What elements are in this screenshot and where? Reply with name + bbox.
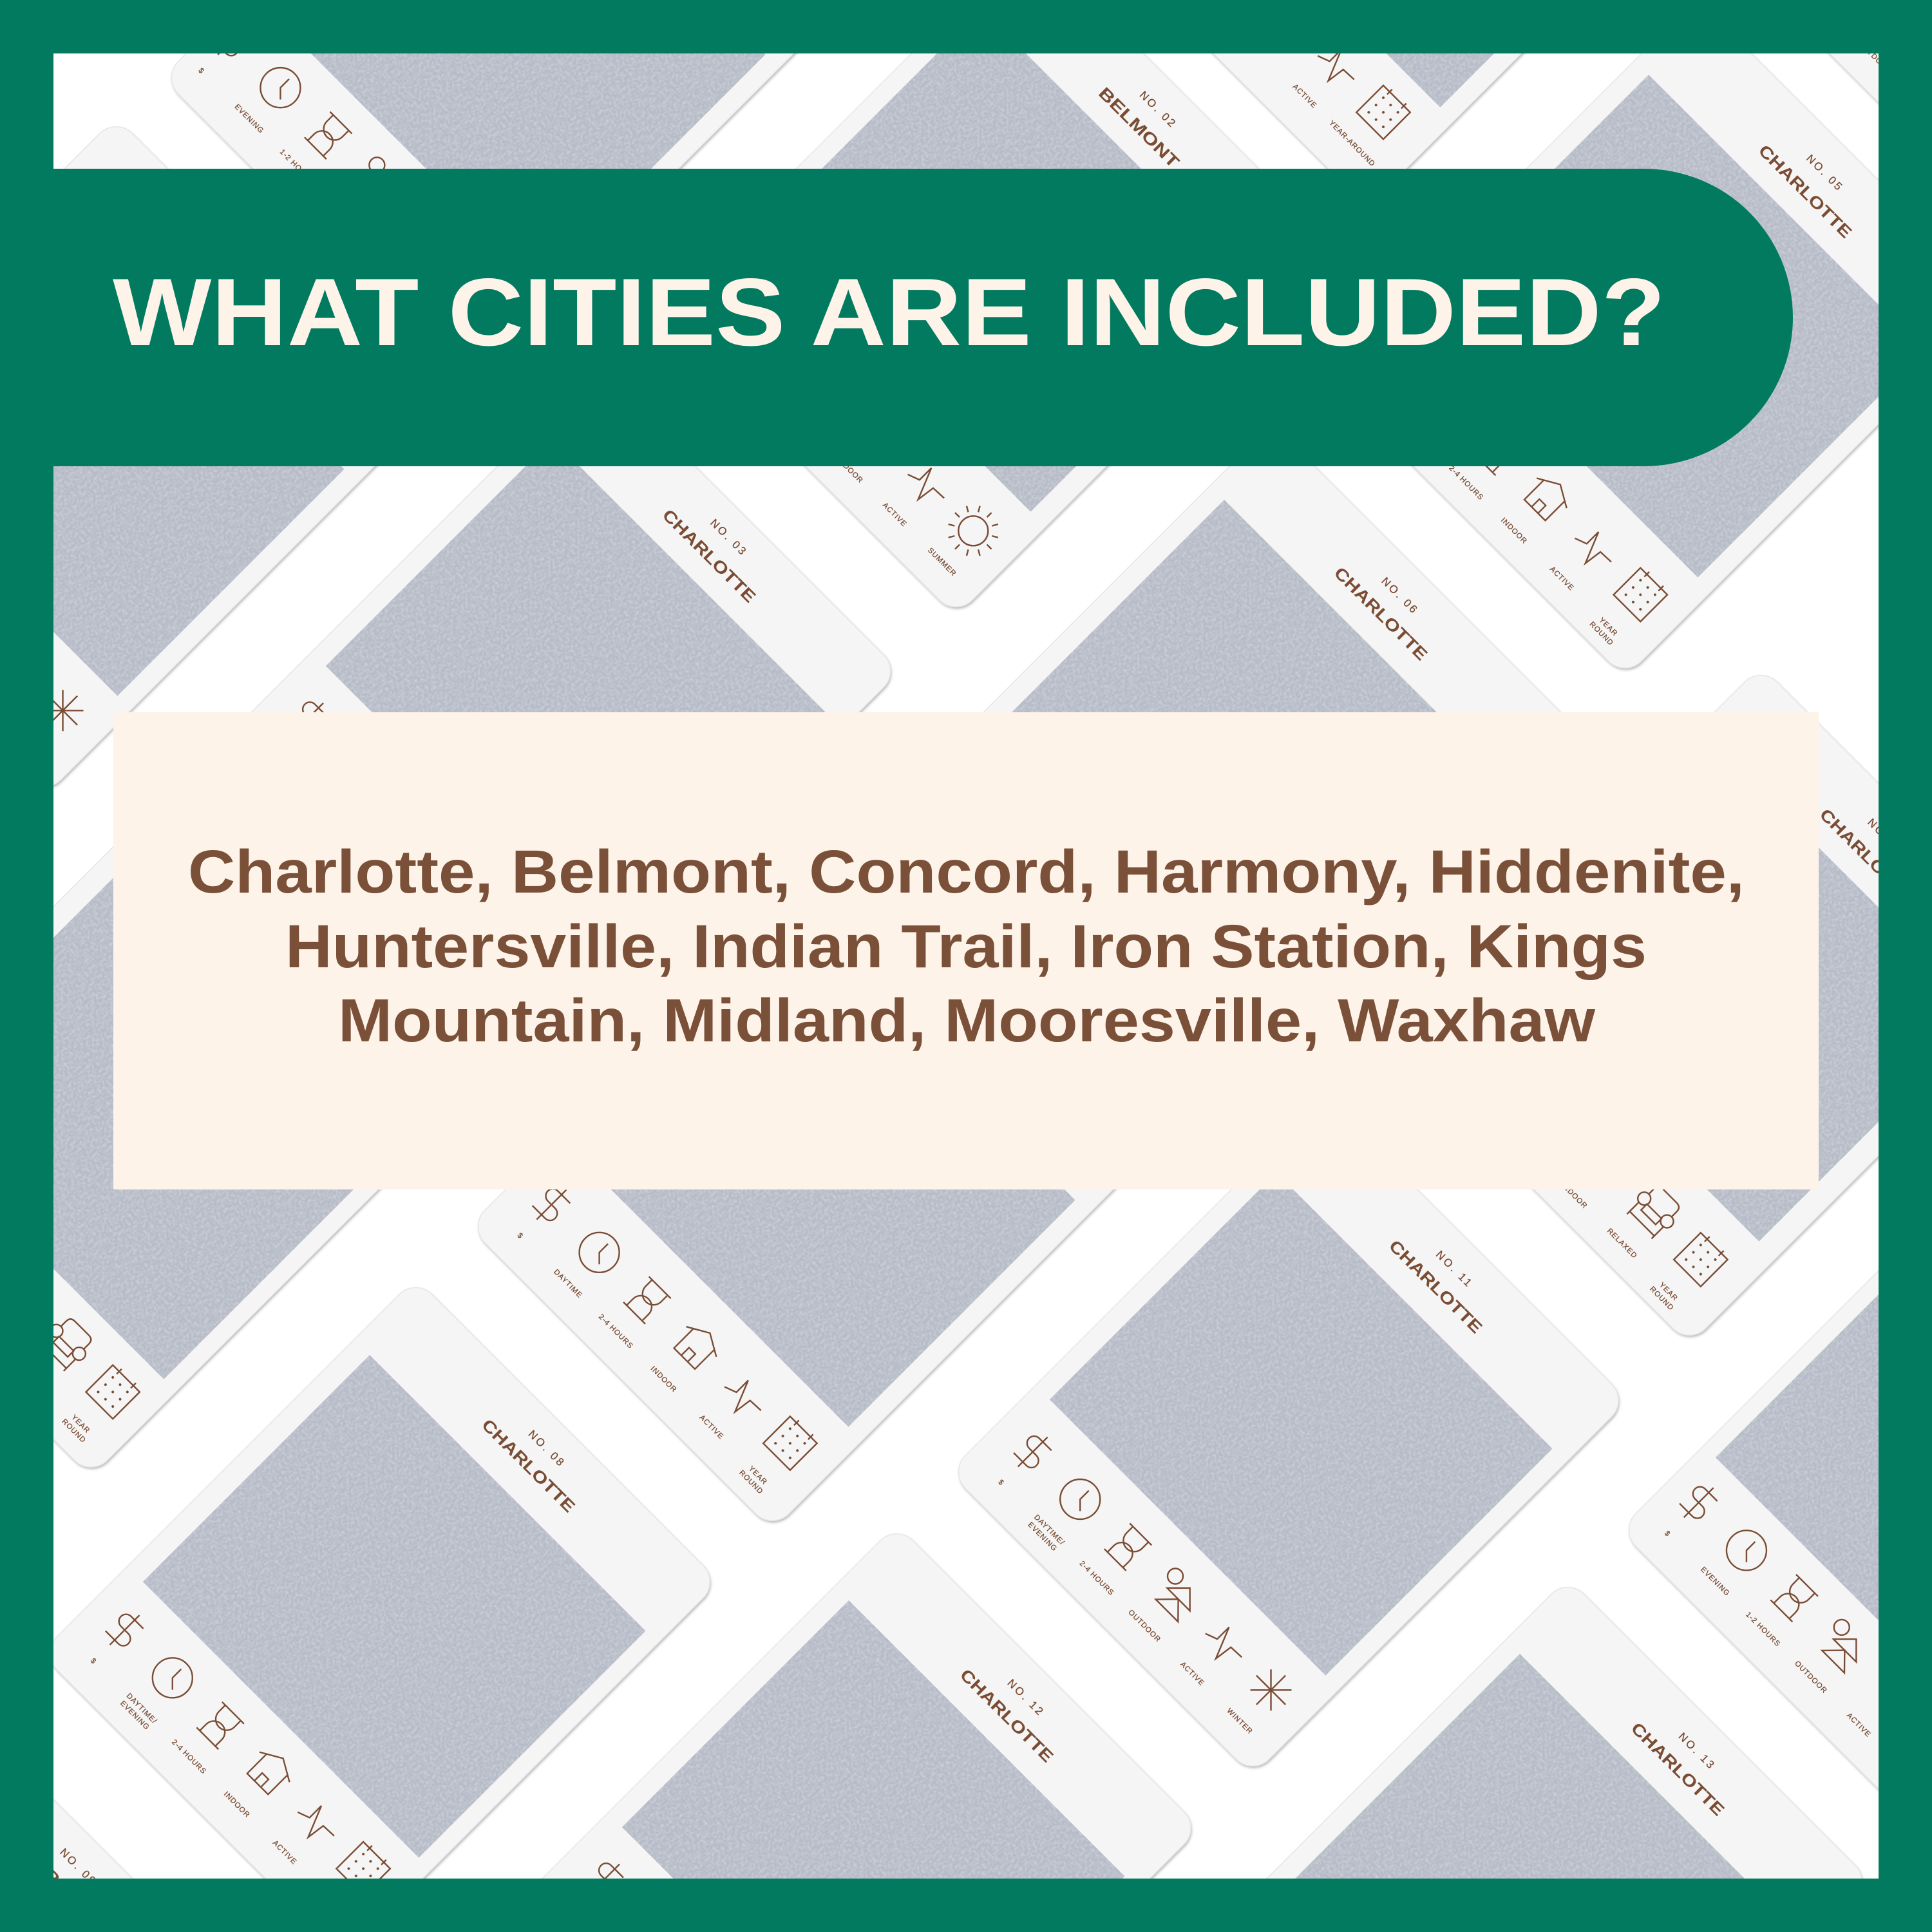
title: CHARLOTTE [9, 1833, 110, 1932]
label: outdoor: OUTDOOR [1857, 40, 1892, 75]
strip [75, 1605, 393, 1922]
strip: WINTER [1225, 1707, 1254, 1736]
title: CHARLOTTE [956, 1665, 1057, 1766]
text block: cities: Huntersville, Indian Trail, Iron Station, Kings [285, 913, 1647, 981]
title: CHARLOTTE [1331, 563, 1432, 664]
strip: ACTIVE [1548, 565, 1575, 592]
card: No. 02 Belmont [652, 0, 1332, 618]
card: bottom-left corner [0, 1696, 255, 1932]
title: CHARLOTTE [1627, 1718, 1728, 1819]
strip: EVENING [118, 1700, 151, 1732]
strip: ROUND [1648, 1285, 1675, 1312]
title [9, 1818, 126, 1932]
title: NO. 08 [526, 1428, 566, 1468]
title [1627, 1703, 1745, 1819]
strip: ACTIVE [1845, 1712, 1872, 1739]
strip: DAYTIME [552, 1268, 583, 1300]
strip: active, summer: SUMMER [926, 547, 958, 578]
strip: 2-4 HOURS [597, 1313, 634, 1350]
strip: 2-4 HOURS [1447, 464, 1485, 502]
title: NO. 03 [708, 516, 748, 557]
title: NO. 06 [1379, 575, 1419, 616]
title: CHARLOTTE [1385, 1236, 1486, 1337]
title [478, 1400, 594, 1516]
strip: $ [516, 1232, 524, 1240]
strip: OUTDOOR [1126, 1609, 1162, 1644]
strip: INDOOR [1560, 1181, 1589, 1211]
icon: dollar [285, 694, 332, 741]
strip [8, 1312, 142, 1447]
card: top-left partly hidden [0, 117, 421, 798]
strip: active, summer: OUTDOOR [829, 450, 864, 485]
strip: cost, time, duration: EVENING [233, 103, 265, 135]
strip: active, year-around: YEAR-AROUND [1327, 119, 1376, 168]
strip: active, summer [829, 402, 1010, 583]
strip: 1-2 HOURS [1744, 1611, 1782, 1649]
title: NO. 05 [1804, 152, 1844, 193]
title: Belmont [1095, 68, 1199, 172]
strip: ROUND [60, 1417, 87, 1444]
icon: winter [33, 681, 92, 740]
strip [1439, 420, 1670, 650]
title [1385, 1220, 1502, 1337]
title: NO. 10 [1865, 816, 1906, 857]
card: No. 06 Charlotte [896, 424, 1577, 1104]
card: No. 11 Charlotte [949, 1097, 1629, 1777]
panel: city list [113, 712, 1819, 1189]
strip [983, 1428, 1300, 1745]
strip: 2-4 HOURS [170, 1738, 207, 1776]
strip: YEAR [1597, 616, 1619, 638]
card: left edge behind text panel [0, 798, 468, 1479]
card: No. 13 Charlotte [1192, 1578, 1873, 1932]
strip: YEAR [70, 1414, 91, 1435]
title: Belmont: BELMONT [1095, 83, 1183, 172]
heading: WHAT CITIES ARE INCLUDED? [113, 258, 1665, 366]
strip: ROUND [1588, 620, 1615, 647]
strip [500, 1180, 819, 1499]
strip: active, year-around [1288, 35, 1421, 168]
strip: INDOOR [222, 1790, 251, 1819]
title: CHARLOTTE [1755, 141, 1856, 242]
strip: EVENING [1027, 1521, 1059, 1553]
strip: YEAR [747, 1465, 768, 1486]
card: centre behind text panel [468, 851, 1149, 1532]
title banner [0, 169, 1793, 466]
strip: $ [1663, 1530, 1672, 1539]
strip: OUTDOOR [1793, 1660, 1828, 1695]
strip [1552, 1136, 1730, 1315]
title: NO. 12 [1005, 1677, 1045, 1718]
title: Belmont: NO. 02 [1137, 89, 1178, 129]
strip: INDOOR [649, 1365, 678, 1394]
strip: YEAR [1658, 1281, 1679, 1303]
card: right edge behind text panel [1385, 666, 1932, 1347]
strip: DAYTIME/ [125, 1692, 158, 1725]
strip: 2-4 HOURS [1078, 1560, 1115, 1597]
strip: active, year-around: ACTIVE [1291, 83, 1318, 110]
title: NO. 13 [1676, 1730, 1716, 1771]
icon: dollar [581, 1855, 628, 1902]
card: top year-around strip [1063, 0, 1744, 209]
title [1816, 788, 1932, 906]
card: No. 12 Charlotte [521, 1524, 1202, 1932]
text block: cities: Mountain, Midland, Mooresville, Waxhaw [338, 987, 1596, 1055]
card: right edge lower [1619, 1155, 1932, 1835]
title: CHARLOTTE [478, 1415, 579, 1516]
strip: cost, time, duration [189, 15, 407, 233]
strip: DAYTIME/ [1032, 1513, 1066, 1547]
title: CHARLOTTE [1816, 805, 1917, 906]
strip: EVENING [1699, 1566, 1731, 1598]
strip: active, summer: ACTIVE [881, 502, 908, 529]
strip: $ [996, 1479, 1005, 1487]
strip: ROUND [737, 1469, 764, 1496]
title [956, 1649, 1074, 1766]
strip: ACTIVE [697, 1414, 725, 1441]
strip [1656, 1479, 1915, 1739]
text block: cities: Charlotte, Belmont, Concord, Harmony, Hiddenite, [188, 838, 1745, 906]
card: No. 08 Charlotte [40, 1278, 721, 1932]
card: No. 05 Charlotte [1321, 0, 1932, 679]
title [1755, 124, 1872, 242]
strip: ACTIVE [1179, 1660, 1206, 1688]
strip: INDOOR [1499, 516, 1528, 545]
title: NO. 11 [1434, 1248, 1474, 1289]
title: CHARLOTTE [659, 506, 760, 607]
strip: ACTIVE [271, 1839, 298, 1866]
strip: RELAXED [1605, 1227, 1638, 1260]
strip: cost, time, duration: $ [197, 67, 205, 76]
text block: cities [188, 838, 1745, 1055]
card: top-right corner [1679, 0, 1932, 209]
title [1331, 547, 1447, 664]
title: NO. 09 [57, 1846, 98, 1886]
card: top evening strip [162, 0, 842, 383]
title [659, 489, 776, 607]
strip: $ [89, 1657, 98, 1666]
strip: cost, time, duration: 1-2 HOURS [278, 148, 316, 185]
card: No. 03 Charlotte [221, 367, 902, 1048]
